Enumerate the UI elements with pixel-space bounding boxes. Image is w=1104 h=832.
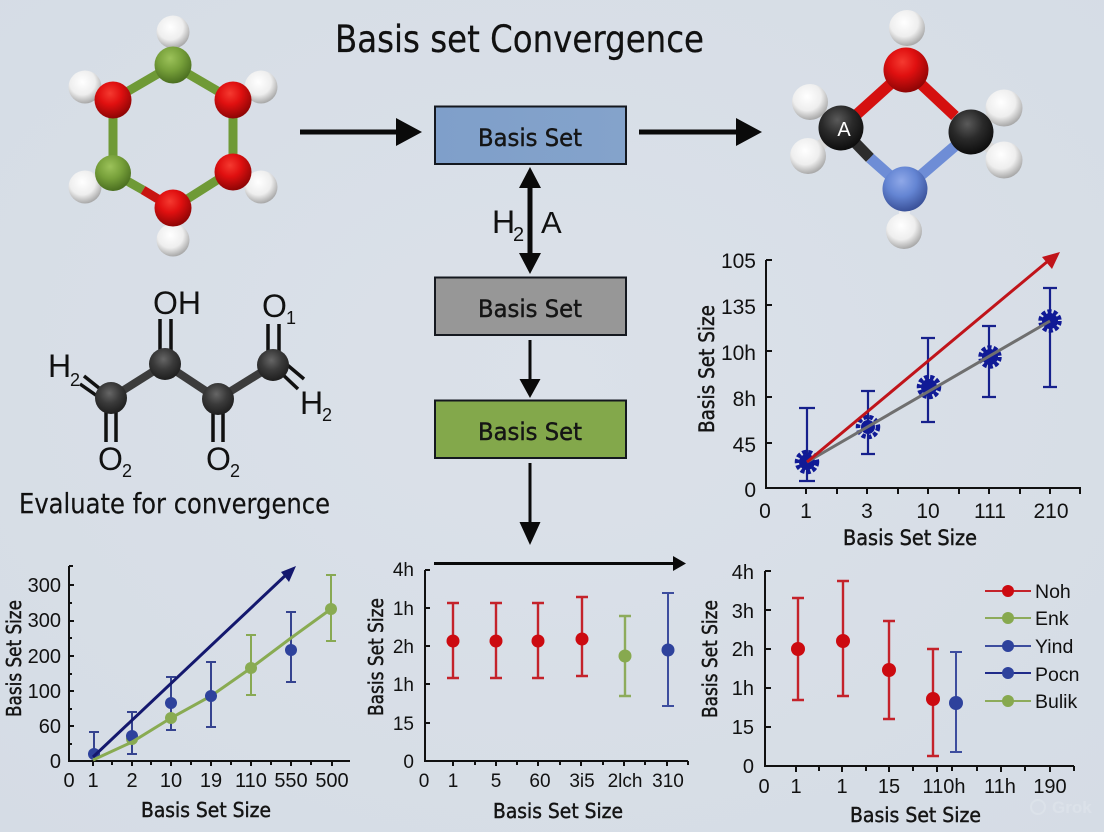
chart: top right scatter: 210 (1033, 500, 1069, 523)
chart: bottom right error bars: 2h (732, 639, 754, 661)
legend: Bulik (1035, 691, 1078, 713)
chart: bottom right error bars: 1 (790, 776, 802, 798)
chart: bottom left line: 100 (28, 681, 61, 703)
molecule: skeletal chain: 2 (230, 461, 240, 481)
chart: top right scatter: 10h (721, 342, 756, 365)
molecule: skeletal chain: OH (153, 285, 201, 321)
chart: bottom left line: 10 (160, 770, 182, 792)
chart: bottom middle error bars: 1 (448, 771, 458, 792)
chart: bottom left line: Basis Set Size (2, 600, 26, 717)
chart: bottom right error bars: 11h (984, 776, 1016, 798)
chart: bottom middle error bars: 2lch (608, 771, 642, 792)
molecule: skeletal chain: 2 (322, 405, 332, 425)
chart: bottom left line: 300 (28, 575, 61, 597)
chart: bottom left line: 550 (274, 770, 308, 792)
molecule: skeletal chain: O (98, 441, 123, 477)
chart: bottom right error bars: 1h (732, 678, 754, 700)
chart: bottom middle error bars: 1h (393, 599, 414, 620)
chart: bottom middle error bars: 2h (393, 637, 414, 658)
chart: bottom right error bars: Basis Set Size (850, 803, 981, 827)
box: grey Basis Set: Basis Set (478, 295, 582, 323)
title: Basis set Convergence (335, 18, 704, 61)
chart: bottom middle error bars: Basis Set Size (493, 799, 623, 823)
molecule: skeletal chain: H (300, 385, 323, 421)
chart: bottom left line: 0 (50, 751, 61, 773)
label: H2 A (492, 204, 562, 246)
label: H2 A: A (541, 205, 562, 240)
chart: top right scatter: 10 (916, 500, 940, 523)
arrow: blue box to second molecule (639, 118, 762, 146)
chart: bottom left line: 300 (28, 610, 61, 632)
chart: bottom right error bars: 3h (732, 601, 754, 623)
chart: top right scatter: 1 (800, 500, 812, 523)
chart: top right scatter: 105 (721, 250, 756, 273)
chart: bottom middle error bars: 5 (491, 771, 501, 792)
chart: bottom middle error bars: 15 (393, 714, 414, 735)
chart: top right scatter: Basis Set Size (843, 526, 977, 550)
box: green Basis Set: Basis Set (478, 418, 582, 446)
chart: top right scatter: 0 (759, 500, 771, 523)
chart: bottom left line: 60 (39, 716, 61, 738)
legend: Yind (1035, 636, 1073, 658)
chart: top right scatter: 135 (721, 296, 756, 319)
watermark: Grok (1052, 798, 1092, 817)
chart: bottom middle error bars: 3i5 (569, 771, 595, 792)
molecule: skeletal chain: O (206, 441, 231, 477)
chart: bottom left line: 200 (28, 646, 61, 668)
legend: Enk (1035, 608, 1069, 630)
chart: bottom left line: 2 (126, 770, 138, 792)
chart: bottom right error bars (698, 562, 1074, 827)
chart: bottom right error bars: 15 (732, 717, 754, 739)
box: blue Basis Set: Basis Set (478, 124, 582, 152)
chart: bottom left line: 0 (63, 770, 75, 792)
chart: bottom right error bars: 0 (743, 756, 754, 778)
molecule: skeletal chain: 2 (122, 461, 132, 481)
chart: top right scatter: 0 (744, 479, 756, 502)
chart: bottom right error bars: 0 (758, 776, 770, 798)
label: H2 A: 2 (513, 224, 524, 246)
chart: bottom middle error bars: 0 (403, 752, 414, 773)
chart: bottom middle error bars: Basis Set Size (364, 598, 388, 716)
molecule: skeletal chain: 2 (70, 370, 80, 390)
watermark (1031, 798, 1092, 817)
chart: bottom right error bars: 110h (922, 776, 966, 798)
chart: bottom left line: 1 (87, 770, 99, 792)
chart: top right scatter: 111 (974, 500, 1006, 523)
chart: bottom middle error bars: 60 (529, 771, 551, 792)
molecule: skeletal chain (48, 285, 332, 481)
chart: bottom left line: Basis Set Size (141, 798, 271, 822)
chart: bottom right error bars: Basis Set Size (698, 600, 722, 718)
chart: bottom middle error bars: 310 (652, 771, 684, 792)
molecule: four-membered ring (790, 10, 1022, 249)
chart: bottom left line: 19 (200, 770, 222, 792)
box: green Basis Set (435, 400, 626, 458)
chart: bottom right error bars: 4h (732, 562, 754, 584)
arrow: green box downward (520, 463, 540, 545)
molecule: skeletal chain: H (48, 348, 71, 384)
arrow: grey to green box (520, 340, 540, 398)
chart: top right scatter: 45 (733, 434, 756, 457)
chart: bottom right error bars: 1 (836, 776, 848, 798)
chart: top right scatter: 8h (733, 388, 756, 411)
arrow: double-headed between blue and grey boxes (519, 167, 541, 274)
chart: bottom right error bars: 190 (1033, 776, 1067, 798)
chart: top right scatter: 3 (861, 500, 873, 523)
chart: top right scatter (695, 250, 1081, 550)
molecule: four-membered ring: A (837, 119, 851, 141)
legend (985, 581, 1079, 713)
chart: bottom middle error bars: 0 (419, 771, 429, 792)
chart: bottom left line: 500 (315, 770, 349, 792)
molecule: six-membered ring (68, 16, 278, 256)
label: H2 A: H (492, 204, 515, 240)
chart: bottom middle error bars: 1h (393, 675, 414, 696)
legend: Pocn (1035, 664, 1079, 686)
chart: bottom left line (2, 566, 350, 822)
chart: bottom right error bars: 15 (878, 776, 900, 798)
molecule: skeletal chain: 1 (286, 308, 296, 328)
legend: Noh (1035, 581, 1071, 603)
box: blue Basis Set (435, 106, 626, 164)
arrow: ring to blue box (300, 118, 422, 146)
chart: bottom middle error bars: 4h (393, 560, 414, 581)
box: grey Basis Set (435, 278, 626, 335)
chart: bottom left line: 110 (235, 770, 267, 792)
molecule: skeletal chain: O (262, 288, 287, 324)
chart: bottom middle error bars (364, 556, 688, 823)
text: evaluate for convergence: Evaluate for convergence (19, 487, 330, 520)
chart: top right scatter: Basis Set Size (695, 305, 719, 433)
